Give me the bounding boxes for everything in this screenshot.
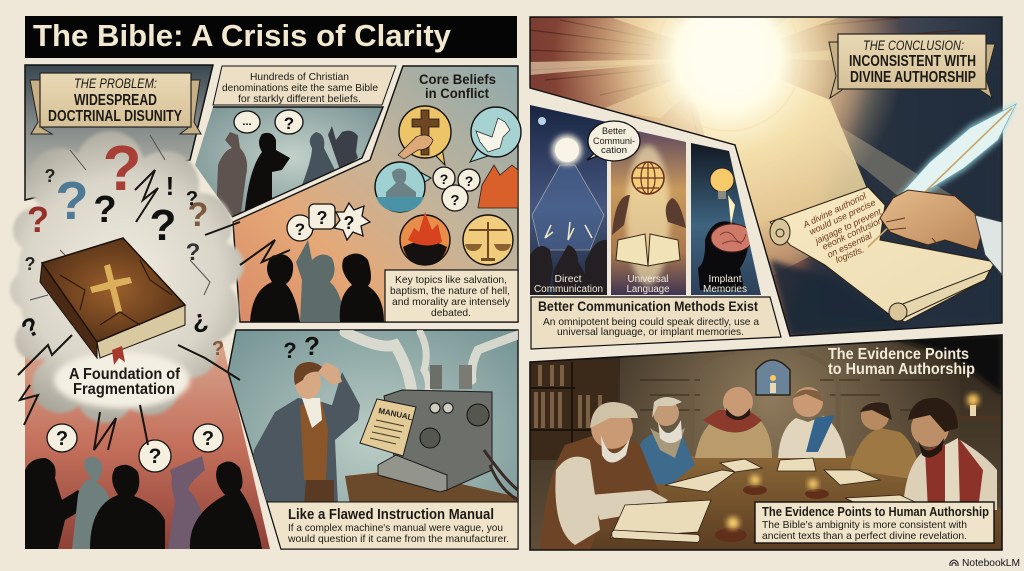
foundation label: Fragmentation [73, 381, 175, 398]
panel: pink crowd scene [25, 340, 275, 550]
sub-panel: implant memories [691, 140, 766, 296]
scrolls on table [610, 458, 915, 543]
table [570, 456, 1002, 550]
scribe figures [540, 387, 997, 550]
denominations caption text [222, 71, 378, 105]
wall candle [955, 394, 1002, 421]
question mark burst bubbles: ? [440, 171, 448, 187]
question marks: ? [93, 189, 117, 231]
better communication speech bubble: Communi- [593, 136, 635, 147]
title text: The Bible: A Crisis of Clarity [33, 18, 452, 53]
banner: the conclusion: THE CONCLUSION: [863, 38, 964, 53]
debate silhouettes [250, 203, 384, 322]
banner: the conclusion: INCONSISTENT WITH [849, 53, 976, 70]
speech bubbles with question marks: ? [202, 428, 214, 450]
implant memories label [704, 274, 747, 292]
debate silhouettes: ? [344, 213, 354, 233]
better communication speech bubble: Better [602, 126, 626, 137]
speech bubbles with question marks [47, 424, 223, 472]
niche with candle [756, 360, 790, 395]
question marks: ? [186, 239, 200, 266]
manual caption: If a complex machine's manual were vague, you [288, 522, 503, 534]
crowd silhouettes [25, 456, 262, 549]
question marks: ? [56, 171, 88, 231]
speech bubbles with question marks: ? [56, 428, 68, 450]
handwritten scroll text: logistls. [834, 244, 866, 265]
foundation label [69, 366, 181, 398]
icon: baptism figure in water [375, 162, 431, 212]
human authorship heading [828, 346, 975, 378]
denominations caption text: Hundreds of Christian [250, 71, 349, 83]
foundation label: A Foundation of [69, 366, 181, 383]
panel: core beliefs in conflict [233, 66, 521, 322]
human authorship heading: to Human Authorship [828, 361, 975, 378]
swirling cloud of confusion [10, 131, 290, 450]
better communication speech bubble [587, 121, 640, 161]
sub-panel: universal language [611, 120, 687, 296]
manual document: MANUAL [378, 406, 413, 422]
icon: hell flames circle [400, 212, 450, 265]
denominations caption box [213, 66, 396, 105]
sub-panel: direct communication [530, 100, 608, 296]
worried man in coat [253, 331, 360, 505]
arguing figures scene [195, 105, 390, 220]
question marks [16, 132, 224, 360]
panel: denominations [195, 66, 396, 220]
banner: the problem [30, 73, 201, 134]
direct communication label: Communication [534, 284, 603, 295]
implant memories label: Implant [708, 274, 742, 285]
key topics caption: Key topics like salvation, [395, 274, 507, 286]
panel: flawed instruction manual [228, 330, 518, 549]
icon: dove [470, 107, 521, 162]
icon: cracked book [40, 238, 185, 365]
question marks: ? [186, 188, 198, 210]
speech bubbles with question marks: ? [149, 445, 161, 468]
writing hand and sleeve [880, 190, 1002, 275]
universal language label: Universal [628, 274, 668, 285]
worried man in coat: ? [283, 338, 297, 363]
icon: glowing quill [868, 102, 1017, 247]
dark streaks in the red sky [530, 18, 960, 134]
question marks: ? [150, 201, 176, 250]
better communication caption: Better Communication Methods Exist [538, 298, 758, 314]
question marks: ! [166, 171, 174, 201]
key topics caption: and morality are intensely [392, 296, 511, 308]
icon: burning fire [478, 165, 518, 208]
key topics caption: debated. [431, 307, 471, 319]
NotebookLM credit: NotebookLM [962, 557, 1020, 569]
panel: human authorship scribes [530, 330, 1002, 552]
arguing figures scene: ... [242, 116, 252, 128]
manual caption: would question if it came from the manufacturer. [287, 533, 509, 545]
question marks: ? [190, 307, 211, 339]
question marks: ? [27, 199, 49, 240]
icon: cross held in hand [398, 106, 451, 165]
universal language label: Language [626, 284, 670, 295]
handwritten scroll text [801, 190, 884, 265]
banner: the problem: THE PROBLEM: [74, 76, 157, 91]
question marks: ? [102, 132, 142, 204]
direct communication label [534, 274, 602, 292]
question mark burst bubbles: ? [465, 173, 473, 189]
bookshelves [530, 360, 620, 460]
question mark burst bubbles: ? [450, 192, 460, 209]
oil lamps [715, 475, 829, 542]
key topics caption [385, 270, 518, 322]
core beliefs heading: Core Beliefs [419, 71, 496, 87]
question mark burst bubbles [433, 167, 480, 211]
question marks: ? [44, 166, 56, 186]
denominations caption text: denominations eite the same Bible [222, 82, 378, 94]
manual document [360, 399, 416, 456]
banner: the problem: WIDESPREAD [74, 92, 157, 109]
core beliefs heading [419, 71, 496, 101]
human authorship caption: ancient texts than a perfect divine revelation. [762, 530, 967, 542]
panel: the problem, upper backdrop [25, 65, 213, 200]
question marks: ? [24, 254, 36, 274]
panel: the conclusion, divine light [530, 0, 1017, 337]
brick wall and arches [640, 379, 940, 411]
title bar [25, 16, 517, 58]
better communication caption: universal language, or implant memories. [557, 326, 744, 338]
arguing figures scene: ? [284, 114, 294, 133]
question marks: ? [188, 196, 208, 234]
key topics caption: baptism, the nature of hell, [390, 285, 510, 297]
question marks: ? [16, 310, 45, 344]
handwritten scroll text: jaigage to prevent [813, 206, 883, 246]
wooden table [345, 472, 518, 502]
handwritten scroll text: A divine authoriol [801, 190, 869, 230]
manual caption [267, 502, 518, 549]
worried man in coat: ? [304, 331, 320, 361]
implant memories label: Memories [703, 284, 747, 295]
debate silhouettes: ? [295, 220, 305, 239]
human authorship caption: The Evidence Points to Human Authorship [762, 504, 989, 519]
banner: the problem: DOCTRINAL DISUNITY [48, 108, 182, 125]
question marks: ? [212, 338, 224, 360]
cracks [18, 135, 290, 450]
better communication speech bubble: cation [601, 145, 627, 156]
light rays [530, 17, 960, 290]
denominations caption text: for starkly different beliefs. [238, 93, 361, 105]
universal language label [626, 274, 670, 295]
panel: better communication methods [530, 100, 781, 349]
handwritten scroll text: on essential [826, 230, 874, 260]
banner: the conclusion: DIVINE AUTHORSHIP [850, 69, 976, 86]
machine with gauges [378, 365, 518, 500]
human authorship caption: The Bible's ambignity is more consistent with [762, 519, 967, 531]
dark lower corner [770, 260, 910, 336]
banner: the conclusion [829, 34, 995, 98]
smoke from machine [345, 332, 518, 395]
human authorship heading: The Evidence Points [828, 346, 969, 363]
core beliefs heading: in Conflict [425, 85, 489, 101]
better communication caption [531, 297, 781, 349]
human authorship caption [755, 502, 994, 543]
direct communication label: Direct [554, 274, 582, 285]
handwritten scroll text: would use precise [808, 197, 877, 237]
icon: scales of justice [463, 215, 513, 265]
manual caption: Like a Flawed Instruction Manual [288, 506, 494, 523]
scroll parchment [770, 187, 995, 322]
better communication caption: An omnipotent being could speak directly, use a [543, 316, 759, 328]
handwritten scroll text: eeonk confusion [821, 215, 884, 252]
debate silhouettes: ? [316, 208, 328, 228]
